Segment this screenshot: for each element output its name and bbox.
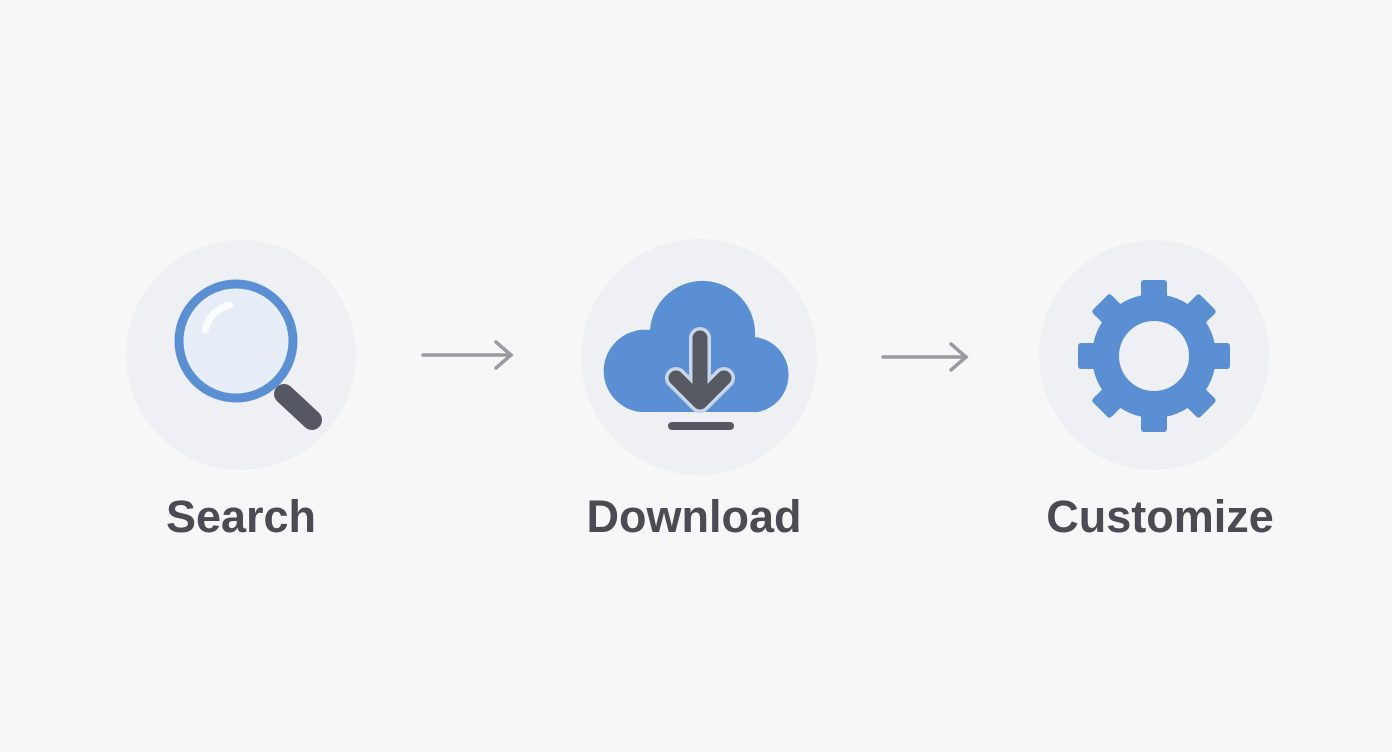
icon: search (126, 240, 356, 470)
arrow 1 (423, 342, 511, 368)
label: Customize: Customize (1046, 491, 1274, 542)
icon: gear (1039, 240, 1269, 470)
icon: cloud download (581, 239, 817, 475)
label: Search: Search (166, 491, 316, 542)
arrow 2 (883, 344, 966, 370)
label: Download: Download (586, 491, 801, 542)
